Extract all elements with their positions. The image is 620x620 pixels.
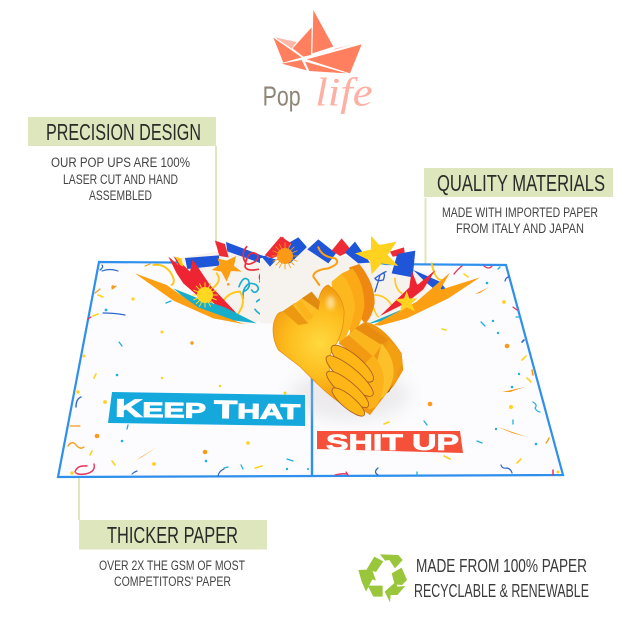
callout: precision design: LASER CUT AND HAND (63, 172, 178, 187)
front hand with thumb (273, 285, 353, 412)
callout: thicker paper (79, 520, 267, 589)
teal wedge (173, 288, 257, 323)
callout: precision design (28, 117, 216, 203)
rear hand ribs (332, 264, 375, 345)
orange wing (373, 273, 480, 326)
yellow star (395, 291, 417, 312)
orange sun (271, 241, 299, 269)
small confetti dots on panel (227, 263, 302, 304)
blue and red paper strips (185, 255, 219, 269)
logo: Poplife (263, 10, 373, 114)
soft shadow under thumbs (290, 369, 410, 421)
yellow ribbons (153, 265, 243, 313)
logo wordmark: life (315, 69, 373, 114)
open card sheet (58, 262, 563, 477)
teal wedge (367, 290, 438, 324)
callout: quality materials (424, 168, 613, 236)
red burst (168, 256, 237, 313)
rear fist finger ribs (338, 335, 373, 362)
logo wordmark (263, 69, 373, 114)
orange sun (272, 243, 298, 269)
text banner: shit up (317, 430, 463, 455)
confetti on card (68, 264, 560, 476)
text: recyclable note (414, 556, 589, 601)
orange star (212, 256, 242, 282)
icon: recycling symbol (358, 554, 407, 602)
logo wordmark: Pop (263, 81, 301, 112)
callout: precision design: ASSEMBLED (89, 188, 152, 203)
white fan panel (177, 250, 310, 325)
yellow star (355, 236, 398, 274)
card centre fold (311, 375, 313, 477)
pop-up thumbs up hands (273, 264, 403, 420)
front fingers (321, 340, 378, 420)
connector lines (79, 146, 426, 520)
callout: thicker paper: OVER 2X THE GSM OF MOST (99, 558, 245, 573)
callout: quality materials: FROM ITALY AND JAPAN (456, 221, 584, 236)
white fan panel (260, 247, 430, 325)
callout: precision design: PRECISION DESIGN (46, 119, 201, 145)
rear fist (333, 322, 403, 415)
yellow sun (192, 282, 218, 308)
front hand finger ribs (283, 305, 308, 325)
icon: origami boat (273, 10, 362, 73)
teal ribbons (239, 278, 273, 317)
callout: thicker paper: THICKER PAPER (107, 522, 238, 548)
red ribbons (243, 247, 287, 289)
blue and red paper strips (265, 237, 292, 258)
orange wing (135, 273, 245, 324)
pop-up fan: right side (260, 236, 480, 326)
text banner: shit up: SHIT UP (326, 430, 459, 455)
small ribbons (313, 247, 442, 317)
red burst (380, 270, 435, 316)
pop-up fan: left side (135, 237, 310, 325)
text banner: keep that: K EEP T HAT (115, 395, 301, 425)
callout: thicker paper: COMPETITORS' PAPER (114, 574, 231, 589)
callout: precision design: OUR POP UPS ARE 100% (51, 155, 190, 170)
fist side ribs with scalloped edge (365, 340, 402, 410)
